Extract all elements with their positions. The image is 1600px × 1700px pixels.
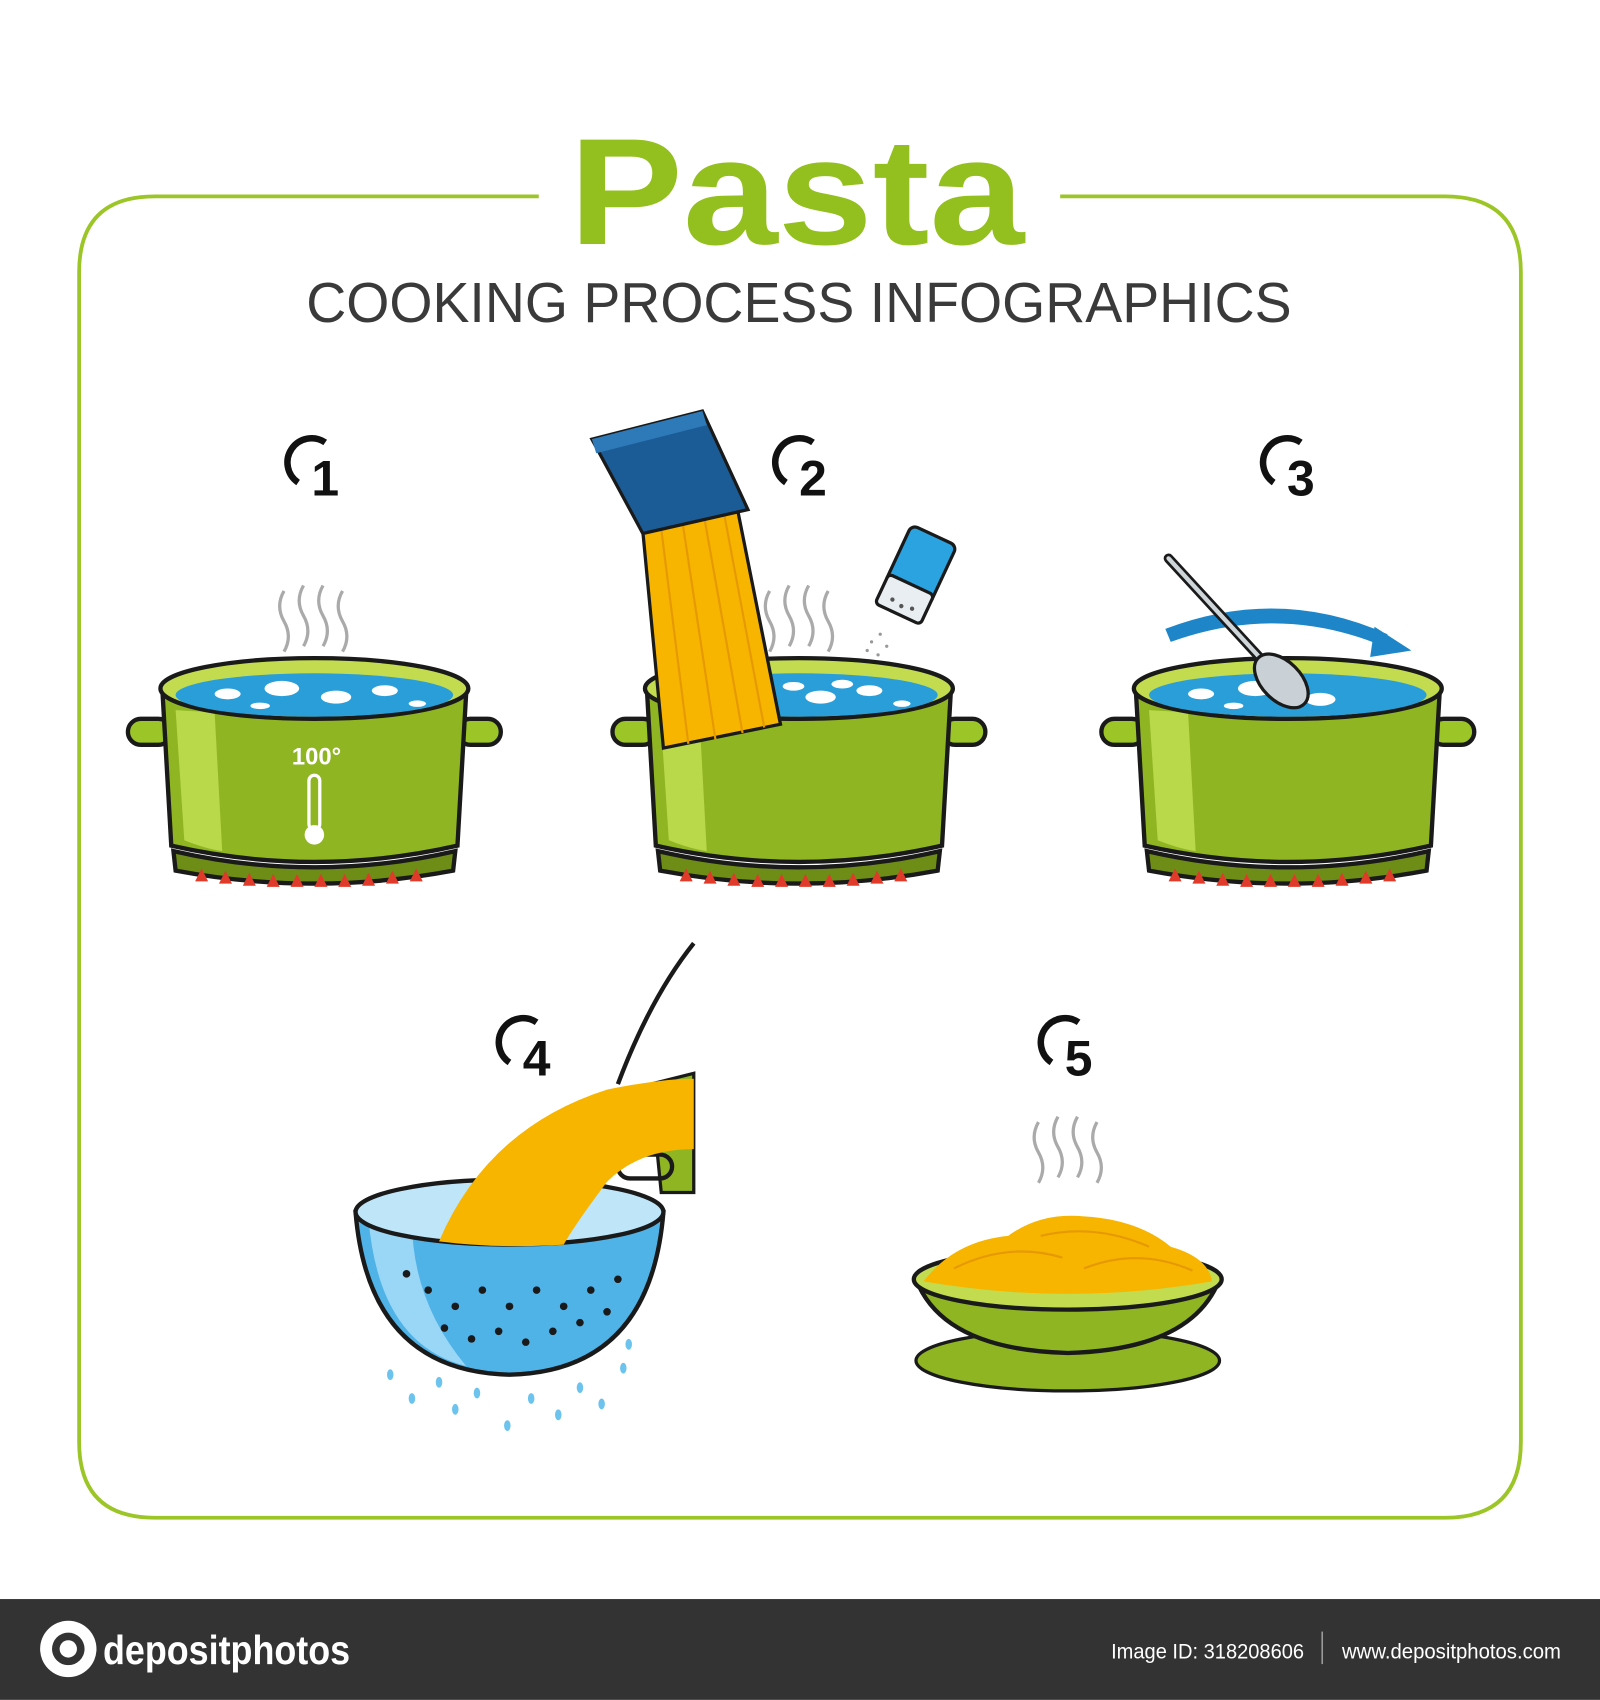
footer bar: www.depositphotos.com	[1341, 1639, 1561, 1664]
colander	[356, 1079, 694, 1375]
plate with pasta	[914, 1216, 1222, 1391]
step number 4: 4	[523, 1030, 551, 1086]
water drops	[387, 1339, 632, 1431]
steam 2	[765, 586, 833, 652]
footer bar: Image ID: 318208606	[1111, 1639, 1304, 1664]
step number 3: 3	[1287, 451, 1315, 507]
title: Pasta	[569, 108, 1026, 277]
subtitle: COOKING PROCESS INFOGRAPHICS	[306, 271, 1292, 334]
spoon	[1169, 558, 1318, 718]
pot 3	[1101, 658, 1474, 887]
thermometer label: 100°	[292, 743, 341, 770]
step number 2	[775, 438, 827, 507]
footer bar: depositphotos	[103, 1627, 350, 1673]
step number 3	[1263, 438, 1315, 507]
step number 1	[287, 438, 339, 507]
pot 1	[128, 658, 501, 887]
frame	[79, 196, 1521, 1518]
stirring arrow	[1165, 608, 1411, 657]
pot 2	[612, 658, 985, 887]
step number 4	[499, 1018, 551, 1086]
salt shaker	[875, 525, 957, 624]
step number 1: 1	[311, 451, 339, 507]
steam 1	[280, 586, 347, 652]
step 4 pot pour	[618, 943, 694, 1193]
step number 5: 5	[1065, 1030, 1092, 1086]
pasta package	[592, 411, 780, 748]
step number 2: 2	[799, 451, 827, 507]
footer bar	[0, 1599, 1600, 1700]
step number 5	[1041, 1018, 1092, 1086]
steam 5	[1034, 1117, 1101, 1183]
